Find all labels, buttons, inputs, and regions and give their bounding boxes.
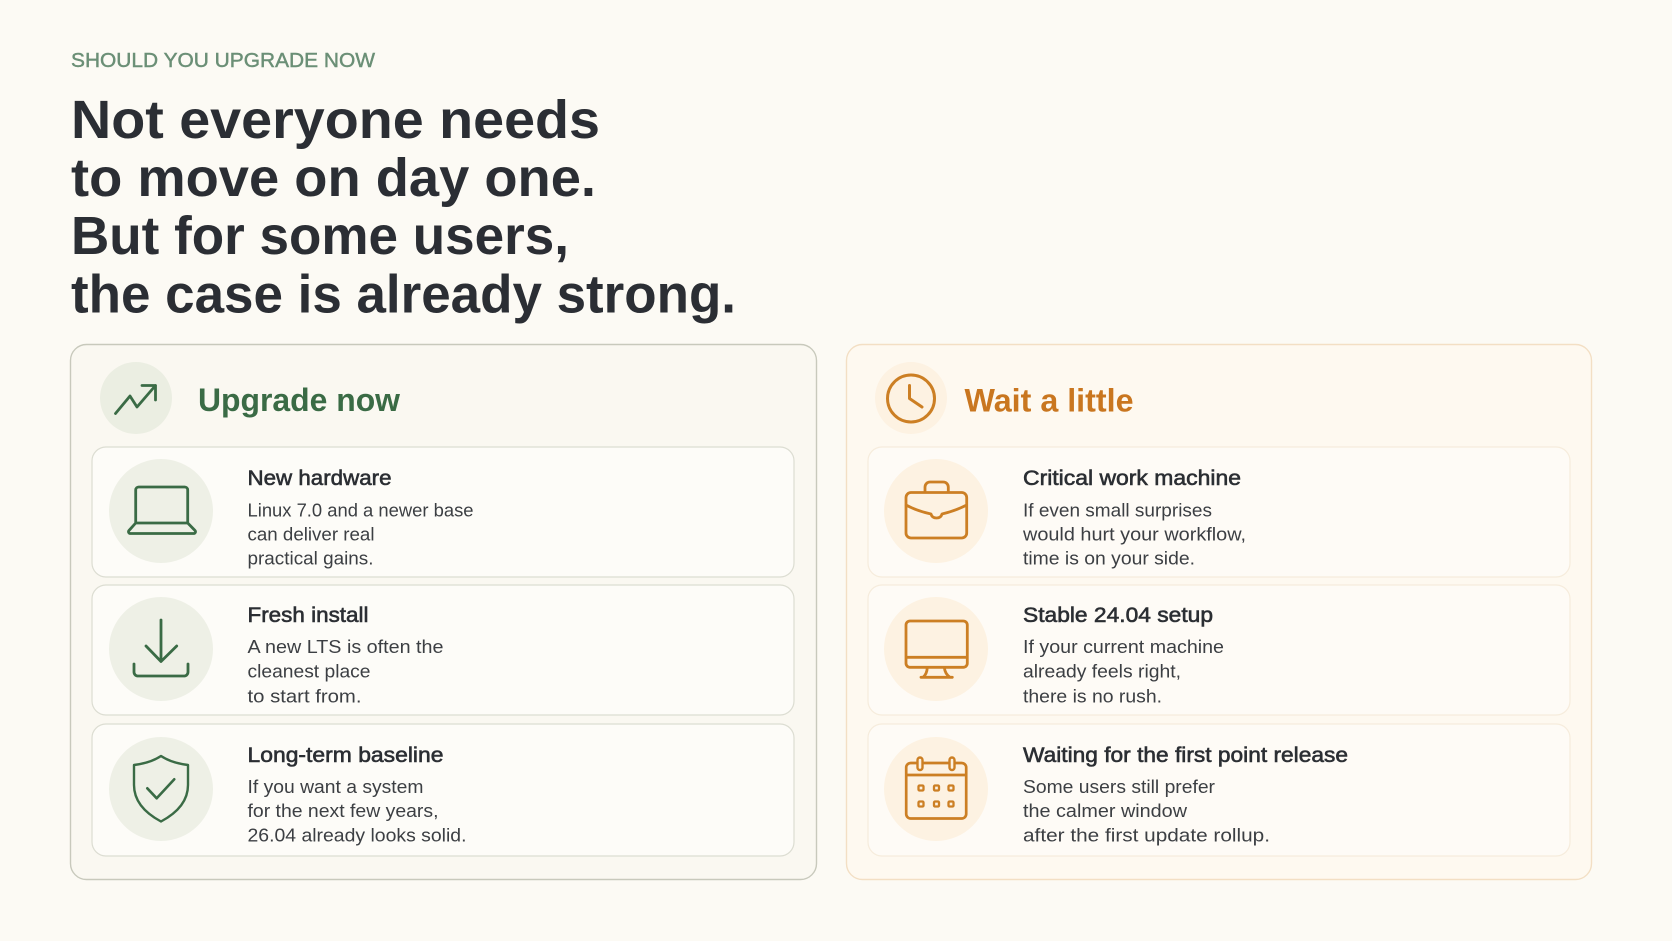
text: stable 24.04 setup bbox=[1023, 603, 1224, 706]
text: new hardware: practical gains. bbox=[248, 548, 374, 568]
text: new hardware: New hardware bbox=[248, 466, 392, 490]
text: fresh install: Fresh install bbox=[248, 603, 368, 627]
icon: clock bbox=[875, 362, 947, 434]
icon: calendar bbox=[884, 737, 988, 841]
text: long-term baseline bbox=[248, 743, 466, 846]
eyebrow: SHOULD YOU UPGRADE NOW bbox=[71, 49, 376, 72]
text: stable 24.04 setup: there is no rush. bbox=[1023, 686, 1162, 706]
icon: download bbox=[109, 597, 213, 701]
row: stable 24.04 setup bbox=[868, 585, 1570, 715]
panel: wait a little bbox=[846, 344, 1592, 880]
text: stable 24.04 setup: If your current machine bbox=[1023, 636, 1224, 657]
icon: monitor bbox=[884, 597, 988, 701]
text: waiting for the first point release: the calmer window bbox=[1023, 800, 1188, 821]
text: new hardware: Linux 7.0 and a newer base bbox=[248, 500, 474, 520]
text: fresh install: cleanest place bbox=[248, 660, 370, 682]
icon: shield check bbox=[109, 737, 213, 841]
text: waiting for the first point release: after the first update rollup. bbox=[1023, 824, 1270, 846]
row: fresh install bbox=[92, 585, 794, 715]
text: waiting for the first point release: Some users still prefer bbox=[1023, 776, 1215, 797]
text: stable 24.04 setup: Stable 24.04 setup bbox=[1023, 603, 1213, 627]
text: fresh install: A new LTS is often the bbox=[248, 636, 444, 657]
title bbox=[71, 90, 736, 324]
text: waiting for the first point release: Waiting for the first point release bbox=[1023, 743, 1348, 767]
text: long-term baseline: 26.04 already looks solid. bbox=[248, 824, 466, 846]
text: new hardware: can deliver real bbox=[248, 524, 374, 544]
icon: laptop bbox=[109, 459, 213, 563]
panel: upgrade now bbox=[70, 344, 816, 880]
row: critical work machine bbox=[868, 447, 1570, 577]
title: Not everyone needs bbox=[71, 90, 600, 150]
title: to move on day one. bbox=[71, 148, 596, 208]
title: the case is already strong. bbox=[71, 264, 736, 324]
text: waiting for the first point release bbox=[1023, 743, 1348, 846]
text: long-term baseline: for the next few years, bbox=[248, 800, 438, 821]
text: stable 24.04 setup: already feels right, bbox=[1023, 660, 1181, 682]
text: new hardware bbox=[248, 466, 474, 568]
row: new hardware bbox=[92, 447, 794, 577]
text: critical work machine: would hurt your workflow, bbox=[1022, 524, 1246, 544]
text: critical work machine bbox=[1022, 466, 1246, 568]
text: critical work machine: Critical work machine bbox=[1023, 466, 1241, 490]
heading: upgrade now: Upgrade now bbox=[198, 382, 401, 418]
row: waiting for the first point release bbox=[868, 724, 1570, 856]
text: fresh install bbox=[248, 603, 444, 706]
text: fresh install: to start from. bbox=[248, 686, 362, 706]
text: critical work machine: If even small surprises bbox=[1023, 500, 1212, 520]
text: long-term baseline: Long-term baseline bbox=[248, 743, 444, 767]
icon: trending up bbox=[100, 362, 172, 434]
title: But for some users, bbox=[71, 206, 569, 266]
text: critical work machine: time is on your side. bbox=[1023, 548, 1195, 568]
icon: briefcase bbox=[884, 459, 988, 563]
row: long-term baseline bbox=[92, 724, 794, 856]
heading: wait a little: Wait a little bbox=[964, 382, 1134, 418]
text: long-term baseline: If you want a system bbox=[248, 776, 424, 797]
